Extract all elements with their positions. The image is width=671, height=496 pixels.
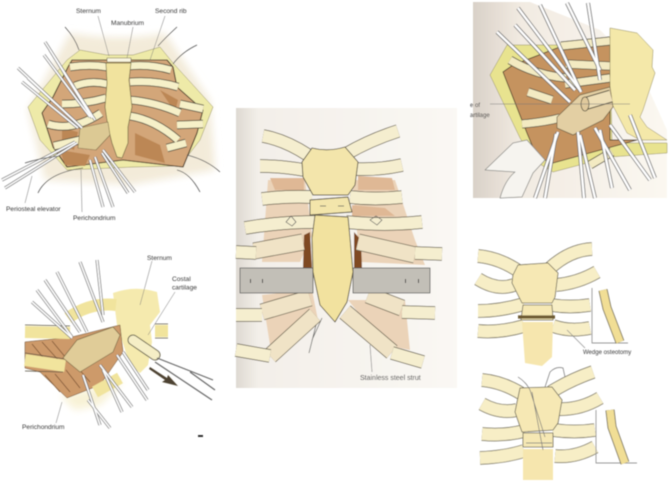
upper cartilage ribs [68,305,116,318]
elevator instrument [133,340,215,400]
sternum [105,63,132,158]
steel strut left [240,268,313,293]
upper manubrium [512,263,558,303]
intercostal muscle [262,180,425,350]
sternum [610,28,667,140]
ribs and costal cartilage [48,66,203,148]
label: Perichondrium: Perichondrium [73,215,116,222]
manubrium [302,147,358,195]
lower inset bone [610,410,625,463]
periosteum [63,327,120,372]
label: Costal cartilage: cartilage [172,284,197,292]
wedge cut [518,315,555,319]
panel: elevating the periosteum [22,255,215,437]
label: Costal cartilage: Costal [172,276,191,283]
manubrium band [107,58,131,62]
forceps [497,3,655,198]
muscle fibres [32,341,90,392]
background [473,2,667,198]
label: cartilage fragment: artilage [470,113,490,119]
yellow tissue margin [28,47,213,170]
sternal body [312,215,353,322]
leader lines [25,16,165,212]
muscle shading [60,90,178,166]
panel: resection close-up [470,2,667,198]
panel background [236,108,457,388]
steel strut right [353,268,430,293]
periosteal patch [557,87,613,135]
lower manubrium [515,387,562,432]
label: Sternum: Sternum [147,255,172,262]
forceps [32,260,148,428]
osteotomy leader [567,330,585,348]
label: Manubrium: Manubrium [111,20,144,27]
muscle [25,325,123,398]
label: Sternum: Sternum [76,8,101,15]
rib outlines [25,324,168,372]
label: Wedge osteotomy: Wedge osteotomy [583,350,631,356]
lower sternal body [523,449,553,480]
retractor outlines [25,27,220,193]
mark [198,435,203,437]
lower sternal segment [523,433,553,447]
leader line [490,103,630,105]
leader line [370,345,372,372]
label: Stainless steel strut: Stainless steel strut [360,375,421,382]
wires [518,368,565,450]
panel: stainless steel strut placement [236,108,457,388]
upper inset bone [603,290,620,342]
upper inset axis [592,288,628,343]
label: Perichondrium: Perichondrium [22,424,65,431]
exposed muscle [42,60,203,167]
cartilage cylinder [581,96,611,111]
gloved hand [485,140,545,198]
skin background [28,33,215,185]
strut screws [250,279,419,283]
leader lines [56,261,175,423]
ribs [510,41,612,165]
sternal segment [310,197,352,215]
ribs [236,131,442,362]
dark cavity strips [303,232,362,268]
elevated periosteum [78,122,110,150]
sternum [113,289,160,373]
dark muscle accents [270,176,395,216]
panel: exposure of the sternum and ribs [2,8,220,222]
tan resected ribs [254,242,415,356]
upper sternal body [522,322,553,366]
rib cartilages [478,249,600,458]
label: partial text left: e of [470,103,480,109]
muscle [503,43,637,163]
sutures [286,206,382,353]
panel: wedge osteotomy and fixation [478,249,637,480]
label: Second rib: Second rib [155,8,187,15]
forceps [2,42,135,207]
cartilage ribs [25,331,168,392]
lower inset axis [596,410,637,463]
label: Periosteal elevator: Periosteal elevator [6,206,61,213]
upper sternal segment [521,305,553,320]
pale tissue background [60,380,125,410]
arrow [149,367,178,386]
yellow tissue margin [490,37,667,172]
